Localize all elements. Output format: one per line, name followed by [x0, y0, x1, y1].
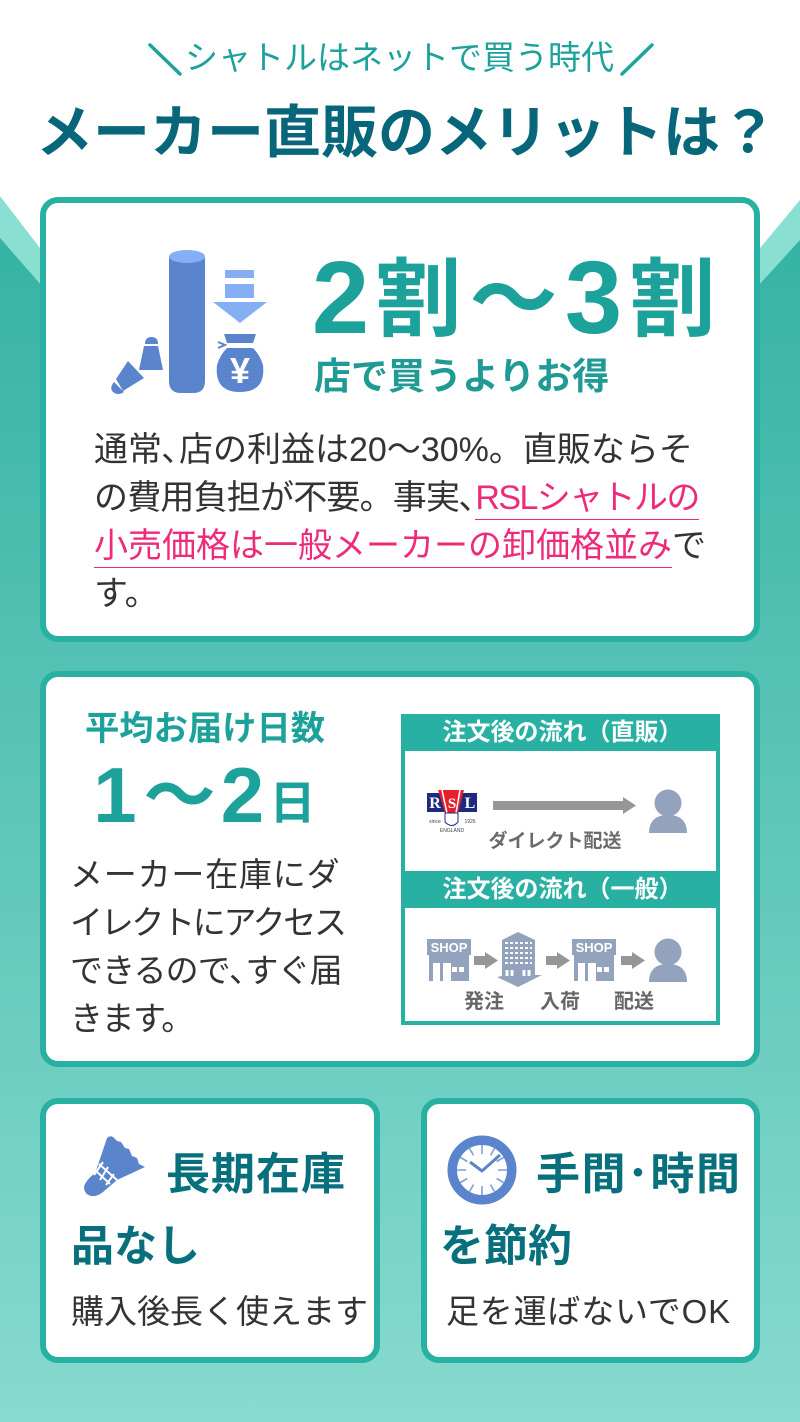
icon: clock [448, 1136, 516, 1204]
flow direct [427, 790, 687, 852]
big number: 割 [376, 252, 462, 348]
panel: stock [40, 1098, 380, 1363]
body text: 通常､店の利益は20〜30%。直販ならそ [94, 431, 693, 469]
heading: 長期在庫 [166, 1150, 346, 1199]
flow general heading [401, 871, 720, 908]
flow general heading: 注文後の流れ（一般） [442, 876, 682, 903]
heading: 手間･時間 [536, 1150, 742, 1199]
flow general [427, 932, 687, 1013]
flow direct: since [429, 819, 441, 825]
heading [71, 1150, 346, 1271]
flow direct heading: 注文後の流れ（直販） [442, 719, 682, 746]
panel: time [421, 1098, 760, 1363]
panel: price [40, 197, 760, 642]
icon: shuttlecock [84, 1136, 145, 1196]
body text: きます。 [70, 1000, 193, 1037]
big number: 割 [630, 252, 716, 348]
heading: 品なし [71, 1223, 200, 1271]
heading: を節約 [440, 1222, 572, 1271]
flow general: 発注 [464, 990, 504, 1013]
body text: できるので､すぐ届 [70, 952, 342, 989]
heading: 平均お届け日数 [85, 710, 325, 748]
big days: 〜 [143, 757, 216, 835]
flow direct: R [429, 795, 441, 812]
flow direct: L [465, 795, 475, 812]
body text: メーカー在庫にダ [70, 856, 340, 893]
big number [312, 240, 716, 350]
big number: 〜 [469, 250, 558, 349]
flow general: 配送 [614, 990, 654, 1013]
body text [94, 431, 706, 613]
flow direct: S [448, 796, 456, 812]
title: メーカー直販のメリットは？ [36, 101, 777, 165]
body text: イレクトにアクセス [70, 904, 345, 941]
flow general: SHOP [576, 940, 613, 955]
body text: の費用負担が不要。事実､RSLシャトルの [94, 479, 699, 517]
big days [93, 751, 316, 835]
flow general: 入荷 [540, 990, 580, 1013]
body text: 小売価格は一般メーカーの卸価格並みで [94, 527, 706, 565]
flow direct: ダイレクト配送 [488, 829, 622, 852]
body text [70, 856, 345, 1037]
flow diagram [401, 714, 720, 1025]
heading [440, 1150, 742, 1271]
big days: 日 [270, 777, 316, 829]
icon: shuttle price: ¥ [230, 350, 250, 391]
icon: shuttle price [111, 250, 267, 394]
flow direct: 1926 [464, 819, 476, 825]
body text: 足を運ばないでOK [446, 1293, 731, 1330]
subtitle: シャトルはネットで買う時代 [185, 39, 614, 76]
sub heading: 店で買うよりお得 [314, 356, 609, 397]
flow direct: ENGLAND [440, 828, 464, 834]
body text: 購入後長く使えます [71, 1293, 368, 1330]
panel: delivery [40, 671, 760, 1067]
body text: す。 [94, 575, 159, 613]
flow general: SHOP [431, 940, 468, 955]
flow direct heading [401, 714, 720, 751]
